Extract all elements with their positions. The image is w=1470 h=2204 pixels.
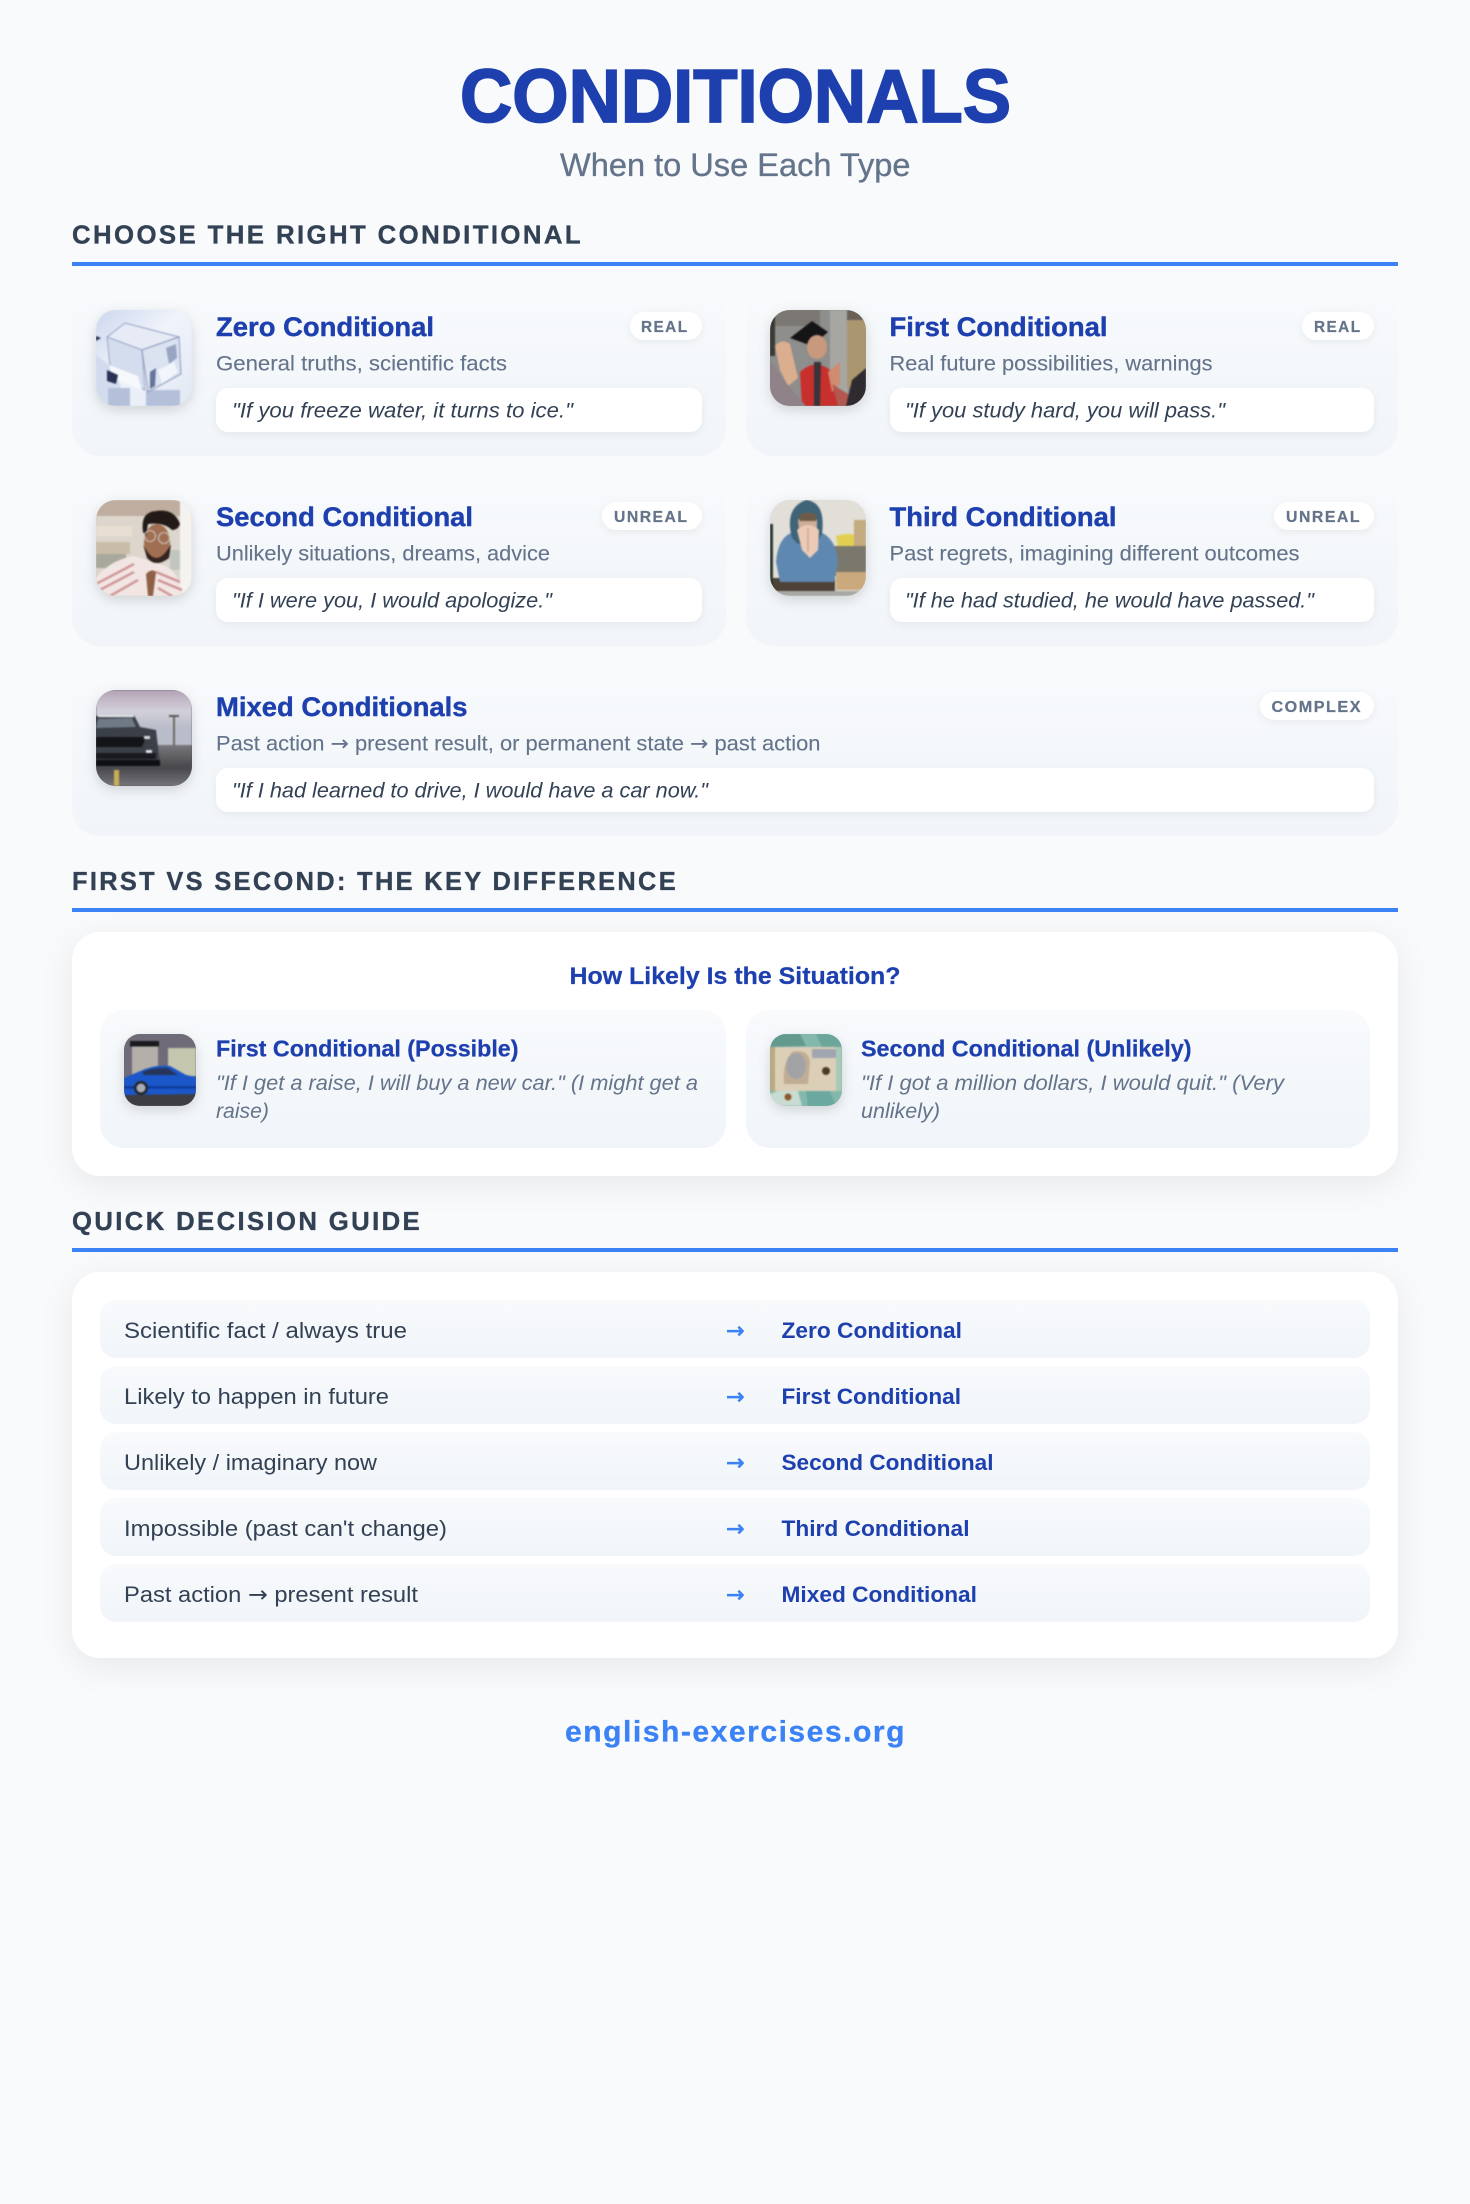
row: unlikely now	[100, 1432, 1370, 1490]
heading: first vs second: FIRST VS SECOND: THE KEY DIFFERENCE	[72, 866, 678, 896]
row: scientific fact: →	[726, 1319, 744, 1344]
row: impossible past: Impossible (past can't change)	[124, 1516, 447, 1541]
panel heading: How Likely Is the Situation?	[570, 963, 900, 990]
example quote	[216, 578, 702, 622]
row: past action: Mixed Conditional	[782, 1582, 977, 1607]
row: likely future: →	[726, 1385, 744, 1410]
row: unlikely now: Unlikely / imaginary now	[124, 1450, 378, 1475]
row: unlikely now: Second Conditional	[782, 1450, 994, 1475]
footer: website: english-exercises.org	[565, 1716, 906, 1748]
section: first vs second	[72, 866, 1398, 1176]
heading: quick decision guide: QUICK DECISION GUIDE	[72, 1206, 422, 1236]
icon: graduate photo	[770, 310, 866, 406]
example quote	[216, 768, 1374, 812]
icon: blue car photo	[124, 1034, 196, 1106]
comparison title: Second Conditional (Unlikely)	[861, 1036, 1192, 1062]
badge: unreal: UNREAL	[614, 509, 688, 526]
panel: zero conditional	[88, 308, 707, 441]
row: scientific fact	[100, 1300, 1370, 1358]
title: CONDITIONALS	[460, 54, 1011, 138]
row: past action	[100, 1564, 1370, 1622]
icon: regretful man photo	[770, 500, 866, 596]
comparison card: second conditional	[746, 1026, 1370, 1148]
row: likely future	[100, 1366, 1370, 1424]
panel: first conditional	[762, 308, 1379, 441]
badge: real	[1302, 312, 1374, 340]
badge: unreal	[602, 502, 702, 530]
icon: banknotes photo	[770, 1034, 842, 1106]
row: scientific fact: Zero Conditional	[782, 1318, 962, 1343]
card title: Mixed Conditionals	[216, 692, 468, 722]
comparison card: first conditional	[100, 1026, 726, 1148]
badge: real: REAL	[641, 319, 688, 336]
card title: Third Conditional	[890, 502, 1116, 532]
example quote: "If you study hard, you will pass."	[905, 400, 1227, 422]
example quote	[890, 388, 1374, 432]
row: impossible past	[100, 1498, 1370, 1556]
example quote: "If I had learned to drive, I would have a car now."	[232, 780, 710, 802]
row: past action: Past action → present result	[124, 1582, 419, 1608]
example quote: "If he had studied, he would have passed."	[905, 590, 1316, 612]
card title: First Conditional	[890, 312, 1108, 342]
example quote: "If I were you, I would apologize."	[232, 590, 554, 612]
section: quick decision guide	[72, 1206, 1398, 1658]
badge: complex	[1260, 692, 1374, 720]
badge: unreal	[1274, 502, 1374, 530]
panel: mixed conditionals	[88, 688, 1379, 821]
icon: ice cube photo	[96, 310, 192, 406]
comparison card: first conditional: raise)	[216, 1100, 269, 1123]
description: Past regrets, imagining different outcomes	[890, 542, 1300, 566]
card title: Zero Conditional	[216, 312, 434, 342]
description: General truths, scientific facts	[216, 352, 507, 376]
comparison example: "If I got a million dollars, I would quit." (Very	[861, 1072, 1286, 1095]
example quote	[216, 388, 702, 432]
row: likely future: Likely to happen in future	[124, 1384, 389, 1409]
row: scientific fact: Scientific fact / always true	[124, 1318, 407, 1343]
panel: second conditional	[88, 498, 707, 631]
panel: decision table	[72, 1272, 1398, 1658]
description: Unlikely situations, dreams, advice	[216, 542, 550, 566]
row: past action: →	[726, 1583, 744, 1608]
icon: dark sports car photo	[96, 690, 192, 786]
icon: thoughtful man photo	[96, 500, 192, 596]
description: Real future possibilities, warnings	[890, 352, 1212, 376]
subtitle: When to Use Each Type	[560, 147, 910, 183]
badge: complex: COMPLEX	[1272, 699, 1362, 716]
panel: third conditional	[762, 498, 1379, 631]
row: unlikely now: →	[726, 1451, 744, 1476]
badge: unreal: UNREAL	[1286, 509, 1361, 526]
row: likely future: First Conditional	[782, 1384, 961, 1409]
heading: choose the right conditional: CHOOSE THE RIGHT CONDITIONAL	[72, 220, 583, 250]
panel: how likely	[71, 966, 1399, 1185]
badge: real	[630, 312, 702, 340]
example quote: "If you freeze water, it turns to ice."	[232, 400, 575, 422]
description: Past action → present result, or permanent state → past action	[216, 732, 820, 756]
row: impossible past: →	[726, 1517, 744, 1542]
example quote	[890, 578, 1374, 622]
card title: Second Conditional	[216, 502, 473, 532]
section: choose the right conditional	[72, 220, 1398, 836]
comparison title: First Conditional (Possible)	[216, 1036, 518, 1062]
row: impossible past: Third Conditional	[782, 1516, 970, 1541]
comparison card: second conditional: unlikely)	[861, 1100, 940, 1123]
badge: real: REAL	[1314, 319, 1362, 336]
comparison example: "If I get a raise, I will buy a new car." (I might get a	[216, 1072, 698, 1095]
